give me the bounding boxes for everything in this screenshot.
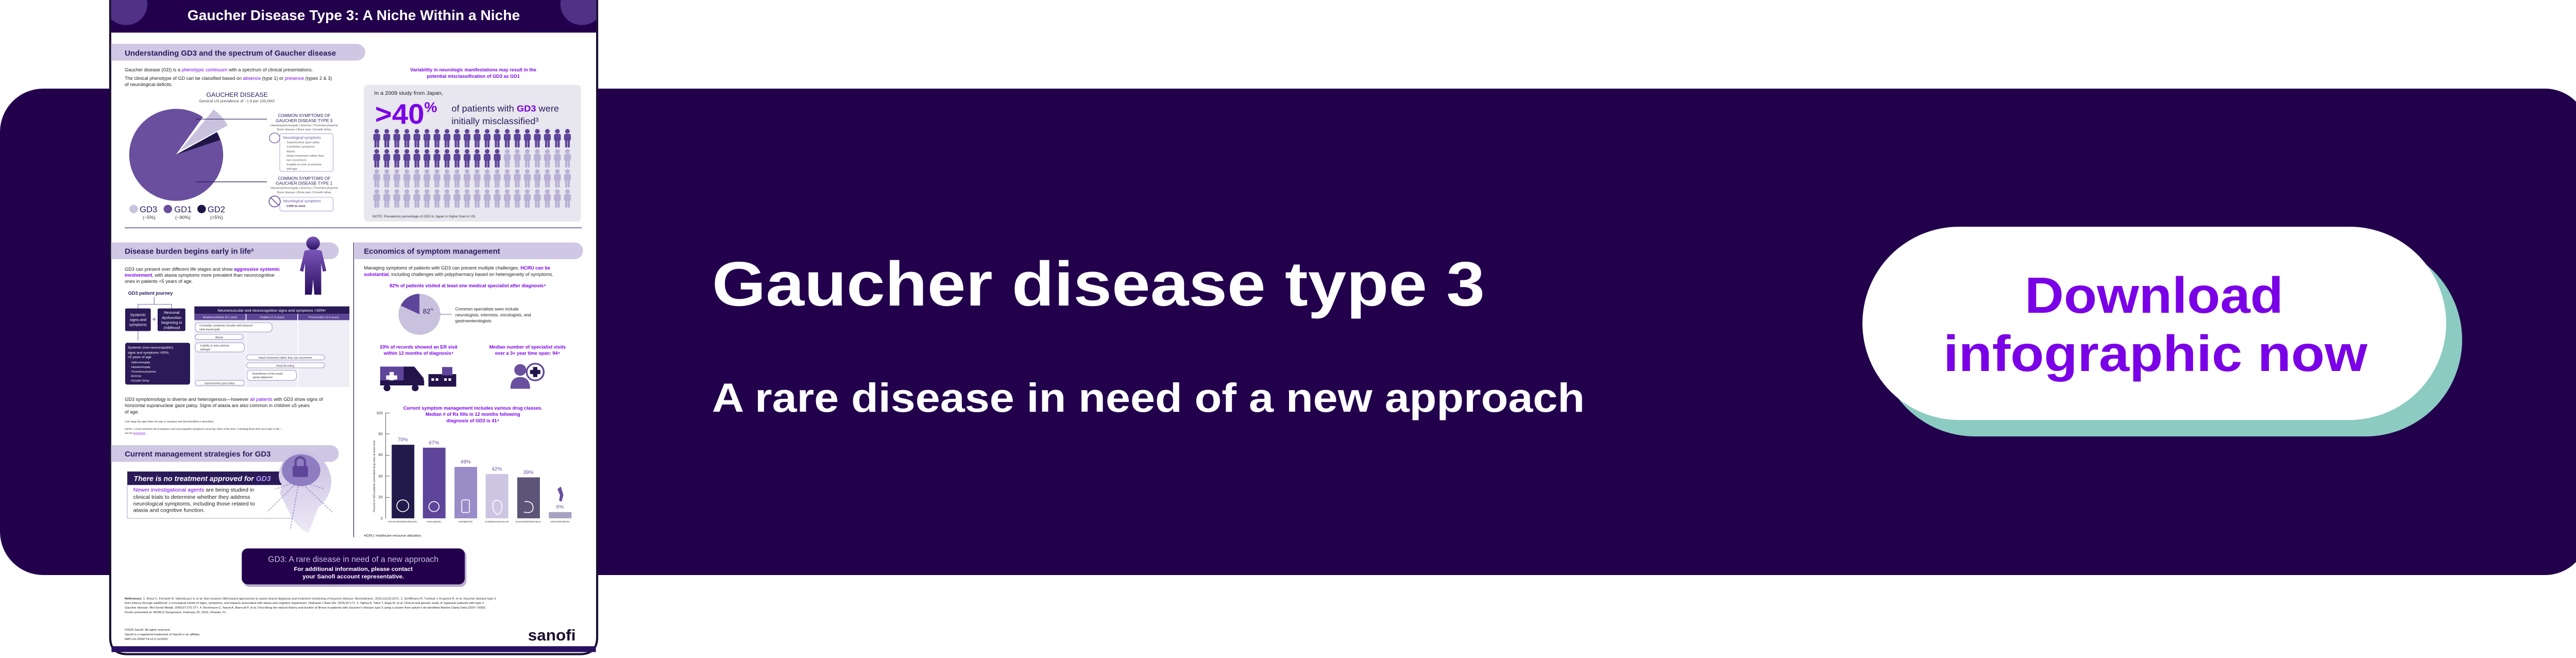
panel: Japan study: NOTE: Prevalence percentage of GD3 in Japan is higher than in US. (372, 215, 476, 218)
patient journey diagram: wide-based gait) (199, 328, 220, 331)
symptoms GD3: · Ataxia (285, 150, 295, 153)
intro text: The clinical phenotype of GD can be classified based on absence (type 1) or presence (types 2 & 3) (125, 76, 332, 81)
symptoms GD1: Hepatosplenomegaly | Anemia | Thrombocytopenia (270, 187, 338, 190)
bar chart: drug classes: 67% (429, 440, 439, 446)
closing callout: your Sanofi account representative. (302, 574, 404, 580)
patient journey diagram: Retroflexion of the head/ (252, 373, 283, 376)
bar chart: drug classes: 6% (556, 504, 564, 510)
patient journey diagram: Neuronal (164, 310, 180, 315)
patient journey diagram: dysfunction (162, 315, 181, 320)
burden text: GD3 patient journey (128, 291, 173, 296)
stat: ER visits (380, 345, 457, 356)
bar chart: drug classes: 80 (379, 432, 383, 436)
patient journey diagram: Ataxia (215, 336, 223, 339)
bar chart: drug classes: ANTIBIOTIC (459, 520, 473, 524)
bar chart: drug classes: 20 (379, 495, 383, 499)
bar chart: drug classes: CARDIOVASCULAR (485, 520, 509, 524)
symptoms GD3: Bone disease | Bone pain | Growth delay (277, 128, 331, 131)
icon: head with lock (267, 451, 332, 533)
symptoms GD1: Bone disease | Bone pain | Growth delay (277, 191, 331, 194)
poster: infographic preview (109, 0, 599, 655)
bar chart: drug classes: 42% (492, 467, 502, 472)
misclassification note: Variability in neurologic manifestations may result in the (410, 68, 536, 73)
burden text: ones in patients <5 years of age. (125, 279, 193, 284)
symptoms GD1: COMMON SYMPTOMS OF (278, 176, 330, 181)
poster header band: Gaucher Disease Type 3: A Niche Within a Niche (188, 7, 520, 23)
callout: no treatment approved: Newer investigational agents are being studied in (133, 487, 254, 493)
economics text: substantial, including challenges with polypharmacy based on heterogeneity of symptoms. (364, 272, 553, 277)
symptoms GD3 (269, 113, 338, 172)
button: download infographic: infographic now (1943, 325, 2368, 382)
pie: specialist visits 82%: % (431, 308, 434, 312)
panel: Japan study: >40 (375, 98, 425, 130)
economics text: Managing symptoms of patients with GD3 can present multiple challenges. HCRU can be (364, 265, 550, 271)
bar chart: drug classes: diagnosis of GD3 is 41⁴ (447, 418, 499, 423)
callout: no treatment approved: clinical trials to determine whether they address (133, 494, 250, 500)
pie legend: GD2 (208, 205, 225, 214)
bar chart: drug classes: 0 (381, 516, 383, 520)
button: download infographic (1862, 227, 2462, 436)
pie chart: Gaucher disease (129, 91, 275, 201)
bar chart: drug classes (364, 406, 571, 538)
callout: no treatment approved: ataxia and cognitive function. (133, 508, 205, 514)
section header: disease burden: Disease burden begins early in life² (125, 248, 253, 256)
title and subtitle (712, 249, 1585, 420)
patient journey diagram: Head thrusting (276, 364, 294, 367)
pie: specialist visits 82%: gastroenterologists (455, 319, 492, 323)
pie: specialist visits 82%: Common specialists seen include (455, 307, 519, 312)
bar chart: drug classes: Percent of GD3 patients prescribed drug class at least once (373, 441, 376, 512)
pie legend: (~5%) (143, 215, 156, 220)
bar chart: drug classes: Current symptom management includes various drug classes. (403, 406, 543, 411)
bar chart: drug classes: PSYCHOTHERAPEUTIC (388, 520, 417, 524)
patient journey diagram: Systemic (130, 312, 146, 317)
patient journey diagram: signs and (130, 317, 146, 322)
button: download infographic: Download (2025, 267, 2283, 324)
symptoms GD1: · Little to none (285, 205, 306, 208)
symptomology text: horizontal supranuclear gaze palsy. Signs of ataxia are also common in children ≤5 years (125, 403, 310, 408)
intro text: Gaucher disease (GD) is a phenotypic continuum with a spectrum of clinical presentations. (125, 68, 313, 73)
patient journey diagram: Inability to look extreme (200, 345, 229, 347)
symptomology text: can be found here. (125, 432, 146, 435)
symptomology text: NOTE: A more extensive list of systemic and neuronopathic symptoms occurring <50% of the time—including those that occur later in life— (125, 428, 282, 431)
patient journey diagram: Newborns/infants (0-1 year) (203, 316, 237, 319)
pie legend: GD1 (174, 205, 192, 214)
bar chart: drug classes: 40 (379, 474, 383, 478)
icon: child silhouette (300, 237, 326, 295)
callout: no treatment approved: neurological symptoms, including those related to (133, 501, 255, 507)
symptoms GD1 (269, 176, 338, 211)
patient journey diagram: Toddlers (1-3 years) (260, 316, 284, 319)
intro text: of neurological deficits. (125, 82, 173, 87)
patient journey diagram (125, 297, 349, 387)
patient journey diagram: · Growth Delay (129, 380, 149, 383)
panel: Japan study: initially misclassified³ (451, 116, 538, 126)
symptoms GD3: left/right (286, 167, 297, 171)
symptoms GD3: GAUCHER DISEASE TYPE 3 (276, 119, 333, 123)
pie legend: (<5%) (210, 215, 223, 220)
copyright: MAT-US-2509774-v2.0-11/2025 (125, 638, 168, 641)
poster frame (110, 0, 597, 654)
patient journey diagram: Supranuclear gaze palsy (205, 382, 235, 385)
icon: ambulance and hospital (380, 366, 456, 391)
bar chart: drug classes: 60 (379, 452, 383, 457)
section header: understanding GD3 (111, 44, 365, 61)
references: References: 1. Rossi C, Ferrante R, Valentinuzzi S, et al. Non-invasive DBS-based approaches to assist clinical diagnosis and treatment monitoring of Gaucher disease. Biomedicines. 2023;11(10):2672. 2. Schiffmann R, Turnbull J, Krupnick R, et al. Gaucher disease type 3 (125, 597, 496, 600)
closing callout: GD3: A rare disease in need of a new approach (268, 555, 438, 564)
copyright: Sanofi is a registered trademark of Sanofi or an affiliate. (125, 633, 200, 636)
misclassification note: potential misclassification of GD3 as GD1 (427, 74, 520, 79)
references (125, 597, 496, 614)
symptoms GD1: GAUCHER DISEASE TYPE 1 (276, 181, 333, 186)
patient journey diagram: spinal alignment (252, 376, 273, 379)
panel: Japan study: % (425, 99, 437, 115)
symptoms GD3: Hepatosplenomegaly | Anemia | Thrombocytopenia (270, 124, 338, 127)
patient journey diagram: · Splenomegaly (129, 361, 150, 364)
symptoms GD3: COMMON SYMPTOMS OF (278, 113, 330, 118)
bar chart: drug classes: GASTROINTESTINAL (516, 520, 541, 524)
pie legend: (~90%) (175, 215, 191, 220)
patient journey diagram: Preschoolers (3-5 years) (309, 316, 339, 319)
closing callout (242, 548, 466, 587)
pie legend (129, 205, 225, 220)
patient journey diagram: signs and symptoms >50%, (128, 351, 170, 355)
symptomology text: of age. (125, 409, 139, 414)
symptoms GD3: · Head movement rather than (285, 155, 324, 158)
section header: economics (354, 243, 583, 259)
intro text (125, 68, 332, 87)
panel: Japan study (364, 85, 581, 222)
title: Gaucher disease type 3 (712, 249, 1485, 319)
references: Poster presented at: WORLD Symposium, February 25, 2023; Orlando, FL. (125, 611, 227, 614)
panel: Japan study: of patients with GD3 were (451, 104, 559, 114)
patient journey diagram: + (152, 316, 157, 324)
burden text: GD3 can present over different life stages and show aggressive systemic (125, 267, 280, 272)
misclassification note (410, 68, 536, 79)
stat: specialist visits: Median number of specialist visits (489, 345, 566, 350)
pie: specialist visits 82% (399, 294, 531, 335)
copyright (125, 628, 200, 641)
patient journey diagram: beginning in (161, 320, 182, 325)
patient journey diagram: · Hepatomegaly (129, 366, 150, 369)
symptoms GD1: Neurological symptoms (283, 200, 321, 204)
patient journey diagram: symptoms (129, 323, 147, 327)
bar chart: drug classes: 49% (461, 460, 471, 465)
economics text (364, 265, 553, 288)
patient journey diagram: · Anemia (129, 375, 142, 378)
symptoms GD3: Neurological symptoms (283, 136, 321, 140)
pie chart: Gaucher disease: General US prevalence of ~1.8 per 100,000¹ (199, 99, 275, 104)
bar chart: drug classes: HCRU, healthcare resource utilization. (364, 534, 422, 538)
closing callout: For additional information, please contact (294, 566, 413, 572)
icon: doctor (511, 364, 544, 389)
bar chart: drug classes: 39% (523, 470, 534, 476)
symptoms GD3: · Cerebellar symptoms (285, 145, 315, 148)
patient journey diagram: left/right (200, 348, 211, 351)
banner background (0, 89, 2576, 575)
bar chart: drug classes: ANALGESIC (427, 520, 442, 524)
panel: Japan study: In a 2009 study from Japan, (374, 90, 443, 96)
stat: specialist visits (489, 345, 566, 356)
section header: disease burden (111, 243, 338, 259)
symptomology text: GD3 symptomology is diverse and heterogenous—however all patients with GD3 show signs of (125, 397, 323, 402)
symptomology text (125, 397, 323, 435)
patient journey diagram: Neuromuscular and neurocognitive signs and symptoms >50%ᵃ (217, 308, 326, 313)
symptoms GD3: eye movement (286, 159, 307, 162)
bar chart: drug classes: 70% (398, 437, 408, 443)
patient journey diagram: Head movement rather than eye movement (259, 357, 312, 360)
references: from infancy through adulthood: a conceptual model of signs, symptoms, and impacts associated with ataxia and cognitive impairment. Orphanet J Rare Dis. 2025;20:171. 3. Tajima A, Yokoi T, Ariga M, et al. Clinical and genetic study of Japanese patients with type 3 (125, 602, 484, 605)
symptoms GD3: · Supranuclear gaze palsy (285, 141, 319, 144)
poster header band (105, 0, 603, 32)
section header: management: Current management strategies for GD3 (125, 450, 270, 459)
callout: no treatment approved: There is no treatment approved for GD3 (134, 475, 271, 483)
patient journey diagram: · Thrombocytopenia (129, 370, 156, 374)
patient journey diagram: childhood (163, 326, 180, 330)
section header: economics: Economics of symptom management (364, 248, 500, 256)
references: Gaucher disease. Mol Genet Metab. 2009;97:272-277. 4. Rochmann C, Nanal A, Biancull P, et al. Describing the natural history and burden of illness in patients with Gaucher's disease type 3 using a cluster from optum's de-identified Market Clarity Data (2007–2020). (125, 606, 486, 610)
section header: management (111, 445, 338, 462)
pie: specialist visits 82%: neurologists, internists, oncologists, and (455, 313, 531, 317)
patient journey diagram: <5 years of age (128, 356, 151, 359)
logo: sanofi: sanofi (528, 626, 575, 644)
copyright: ©2025 Sanofi. All rights reserved. (125, 628, 171, 632)
stat: ER visits: within 12 months of diagnosis⁴ (383, 351, 453, 356)
bar chart: drug classes: Median # of Rx fills in 12 months following (426, 412, 520, 417)
pie legend: GD3 (140, 205, 157, 214)
callout: no treatment approved (127, 471, 292, 518)
economics text: 82% of patients visited at least one medical specialist after diagnosis⁴ (389, 283, 546, 288)
stat: ER visits: 33% of records showed an ER visit (380, 345, 457, 350)
bar chart: drug classes: ANTIARTHRITIC (550, 520, 570, 524)
burden text (125, 267, 280, 296)
symptoms GD3: · Inability to look at extreme (285, 163, 321, 166)
stat: specialist visits: over a 3+ year time span: 94⁴ (495, 351, 560, 356)
pie: specialist visits 82%: 82 (423, 308, 431, 315)
patient journey diagram: Systemic (non-neuronopathic) (128, 346, 173, 350)
subtitle: A rare disease in need of a new approach (712, 375, 1585, 420)
patient journey diagram: Cerebellar symptoms (trouble with balance/ (199, 325, 253, 328)
section header: understanding GD3: Understanding GD3 and the spectrum of Gaucher disease (125, 49, 336, 58)
symptomology text: ᵃLife stage (by age) when the sign or symptom was first identified or described. (125, 420, 214, 423)
bar chart: drug classes: 100 (376, 411, 383, 415)
burden text: involvement, with ataxia symptoms more prevalent than neurocognitive (125, 273, 275, 278)
pie chart: Gaucher disease: GAUCHER DISEASE (206, 91, 268, 98)
